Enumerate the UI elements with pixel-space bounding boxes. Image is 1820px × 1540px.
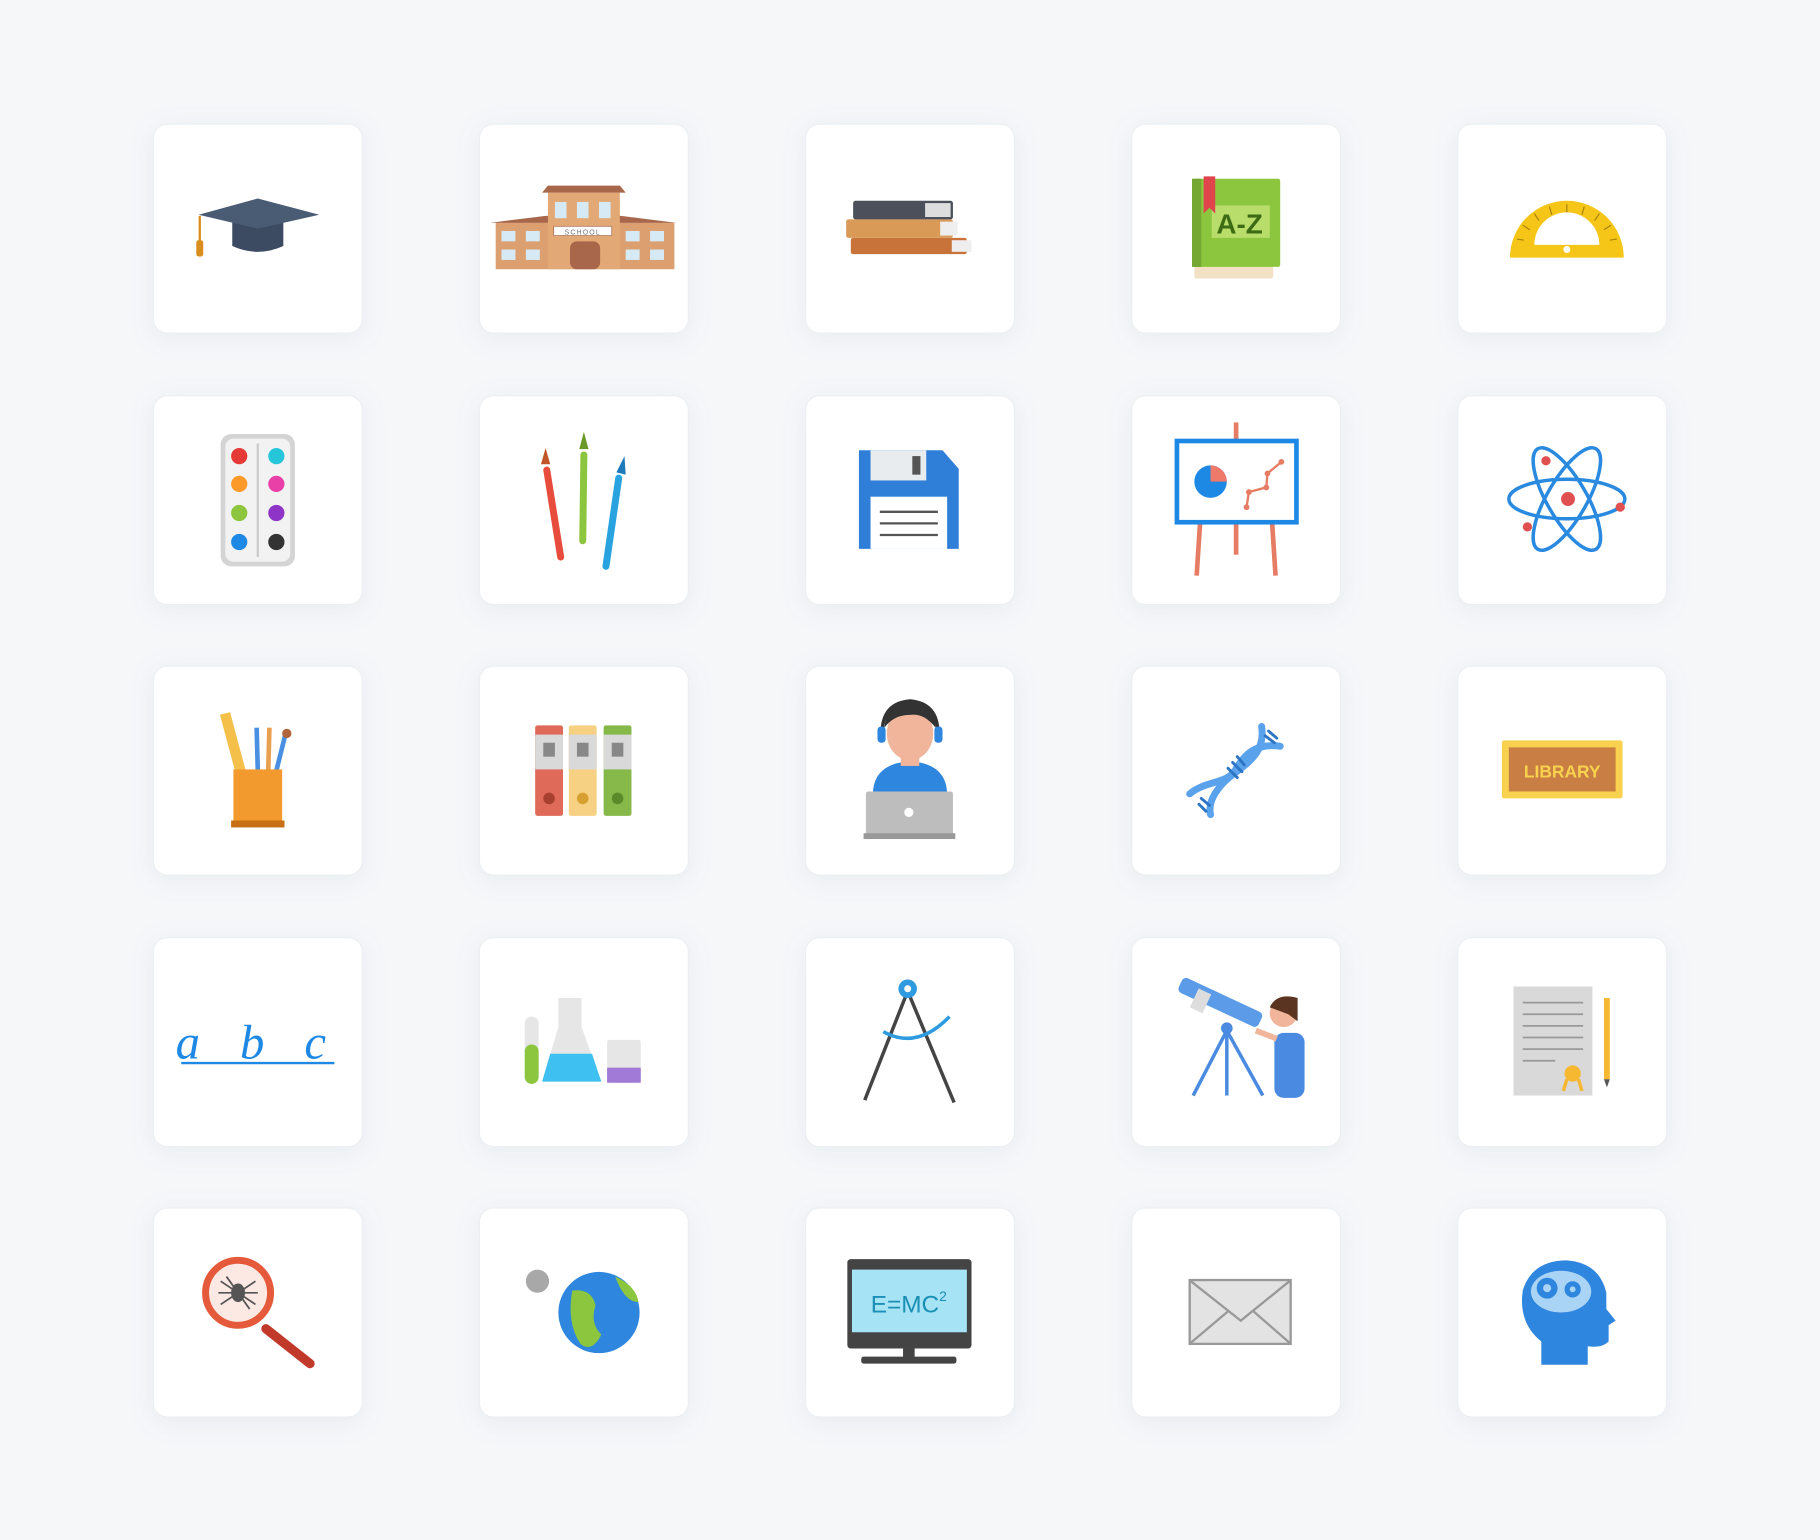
icon: magnifier with spider: [206, 1260, 310, 1364]
icon: A-Z book: A-Z: [1216, 208, 1263, 239]
icon: abc script: a b c: [176, 1015, 340, 1069]
icon: library sign: [1502, 740, 1623, 798]
icon: pencil cup: [220, 712, 291, 827]
icon: telescope with person: [1177, 976, 1305, 1098]
icon: binders: [535, 725, 631, 816]
icon: monitor E=MC2: [847, 1259, 972, 1364]
icon: school building: [490, 186, 677, 269]
icon: envelope: [1190, 1280, 1291, 1344]
icon: paint palette: [221, 434, 295, 566]
icon: protractor: [1510, 201, 1624, 258]
icon: presentation easel: [1177, 422, 1296, 576]
icon: certificate: [1513, 986, 1610, 1096]
icon: floppy disk: [859, 450, 959, 549]
icon: head with gears: [1522, 1260, 1616, 1365]
icon: stack of books: [846, 201, 972, 254]
icon: earth and moon: [526, 1270, 640, 1353]
icon: paint brushes: [541, 432, 626, 566]
icon: library sign: LIBRARY: [1524, 762, 1601, 782]
icon: lab flasks: [525, 998, 641, 1084]
icon: school building: SCHOOL: [565, 229, 601, 236]
icon: atom: [1509, 439, 1625, 559]
icon: student with laptop: [864, 701, 955, 839]
icon: monitor E=MC2: 2: [939, 1288, 947, 1304]
icon: graduation cap: [196, 198, 319, 256]
icon: A-Z book: [1192, 176, 1280, 279]
icon: monitor E=MC2: E=MC: [871, 1292, 939, 1319]
icon: DNA: [1190, 726, 1280, 815]
icon: compass: [865, 979, 954, 1102]
